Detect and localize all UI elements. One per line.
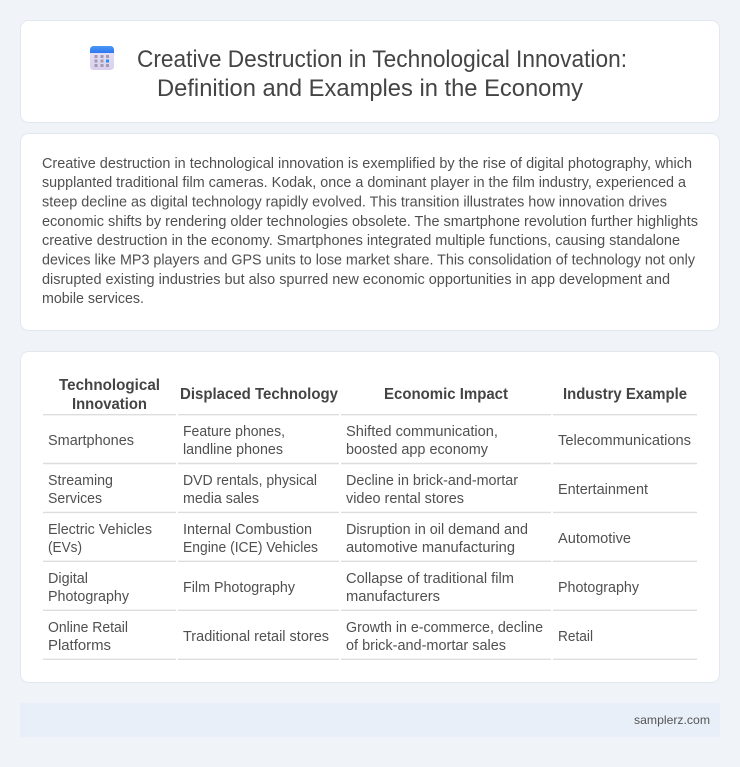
table row: smartphones: boosted app economy	[346, 442, 489, 458]
table row: streaming services: Services	[48, 491, 102, 507]
text block: description paragraph: mobile services.	[42, 291, 144, 307]
title	[137, 46, 627, 102]
panel: table	[20, 352, 720, 682]
table row: digital photography: Collapse of traditional film	[346, 571, 514, 587]
table row: streaming services: video rental stores	[346, 491, 464, 507]
table row: electric vehicles: Disruption in oil demand and	[346, 522, 528, 538]
table header row: Technological	[59, 377, 160, 394]
table header row: Innovation	[72, 396, 147, 413]
table row: streaming services: media sales	[183, 491, 259, 507]
table row: streaming services: DVD rentals, physical	[183, 473, 317, 489]
table row: electric vehicles: Electric Vehicles	[48, 522, 152, 538]
table header row	[59, 377, 687, 413]
footer	[20, 703, 720, 737]
text block: description paragraph: Creative destruction in technological innovation is exemplified by the rise of digital photography, which	[42, 156, 692, 172]
table row: smartphones: landline phones	[183, 442, 283, 458]
table row: digital photography: Photography	[48, 589, 130, 605]
table row: electric vehicles: (EVs)	[48, 540, 82, 556]
table header row: Displaced Technology	[180, 386, 338, 403]
text block: description paragraph: creative destruction in the economy. Smartphones integrated multiple functions, causing standalone	[42, 233, 680, 249]
table row: streaming services	[48, 473, 648, 507]
panel: description	[20, 134, 720, 330]
table row: smartphones: Feature phones,	[183, 424, 285, 440]
icon: calendar	[90, 46, 114, 70]
table row: electric vehicles	[48, 522, 631, 556]
table row: digital photography: manufacturers	[346, 589, 440, 605]
table row: online retail: Traditional retail stores	[183, 629, 329, 645]
table row: online retail: Retail	[558, 629, 593, 645]
text block: description paragraph	[42, 156, 698, 307]
table row: electric vehicles: Automotive	[558, 531, 631, 547]
table row: smartphones: Telecommunications	[558, 433, 691, 449]
table row: digital photography: Photography	[558, 580, 640, 596]
title: Definition and Examples in the Economy	[157, 75, 583, 102]
table row: online retail: Platforms	[48, 638, 111, 654]
table row: online retail: Online Retail	[48, 620, 128, 636]
table row: streaming services: Entertainment	[558, 482, 648, 498]
panel: title card	[20, 20, 720, 122]
table row: electric vehicles: Internal Combustion	[183, 522, 312, 538]
table row: smartphones	[48, 424, 691, 458]
text block: description paragraph: steep decline as digital technology rapidly evolved. This transition illustrates how innovation drives	[42, 194, 667, 210]
table row: streaming services: Streaming	[48, 473, 113, 489]
table row: streaming services: Decline in brick-and-mortar	[346, 473, 518, 489]
footer: samplerz.com	[634, 713, 710, 727]
text block: description paragraph: disrupted existing industries but also spurred new economic opportunities in app development and	[42, 272, 670, 288]
table row: smartphones: Smartphones	[48, 433, 134, 449]
text block: description paragraph: economic shifts by rendering older technologies obsolete. The smartphone revolution further highlights	[42, 214, 698, 230]
table row: digital photography: Digital	[48, 571, 88, 587]
text block: description paragraph: supplanted traditional film cameras. Kodak, once a dominant player in the film industry, experienced a	[42, 175, 686, 191]
table row: digital photography	[48, 571, 640, 605]
table header row: Industry Example	[563, 386, 687, 403]
table row: online retail	[48, 620, 593, 654]
table row: online retail: of brick-and-mortar sales	[346, 638, 506, 654]
title: Creative Destruction in Technological Innovation:	[137, 46, 627, 73]
text block: description paragraph: devices like MP3 players and GPS units to lose market share. This consolidation of technology not only	[42, 252, 696, 268]
table row: electric vehicles: Engine (ICE) Vehicles	[183, 540, 318, 556]
table header row: Economic Impact	[384, 386, 509, 403]
table row: smartphones: Shifted communication,	[346, 424, 498, 440]
table row: electric vehicles: automotive manufacturing	[346, 540, 515, 556]
table row: online retail: Growth in e-commerce, decline	[346, 620, 543, 636]
table row: digital photography: Film Photography	[183, 580, 296, 596]
